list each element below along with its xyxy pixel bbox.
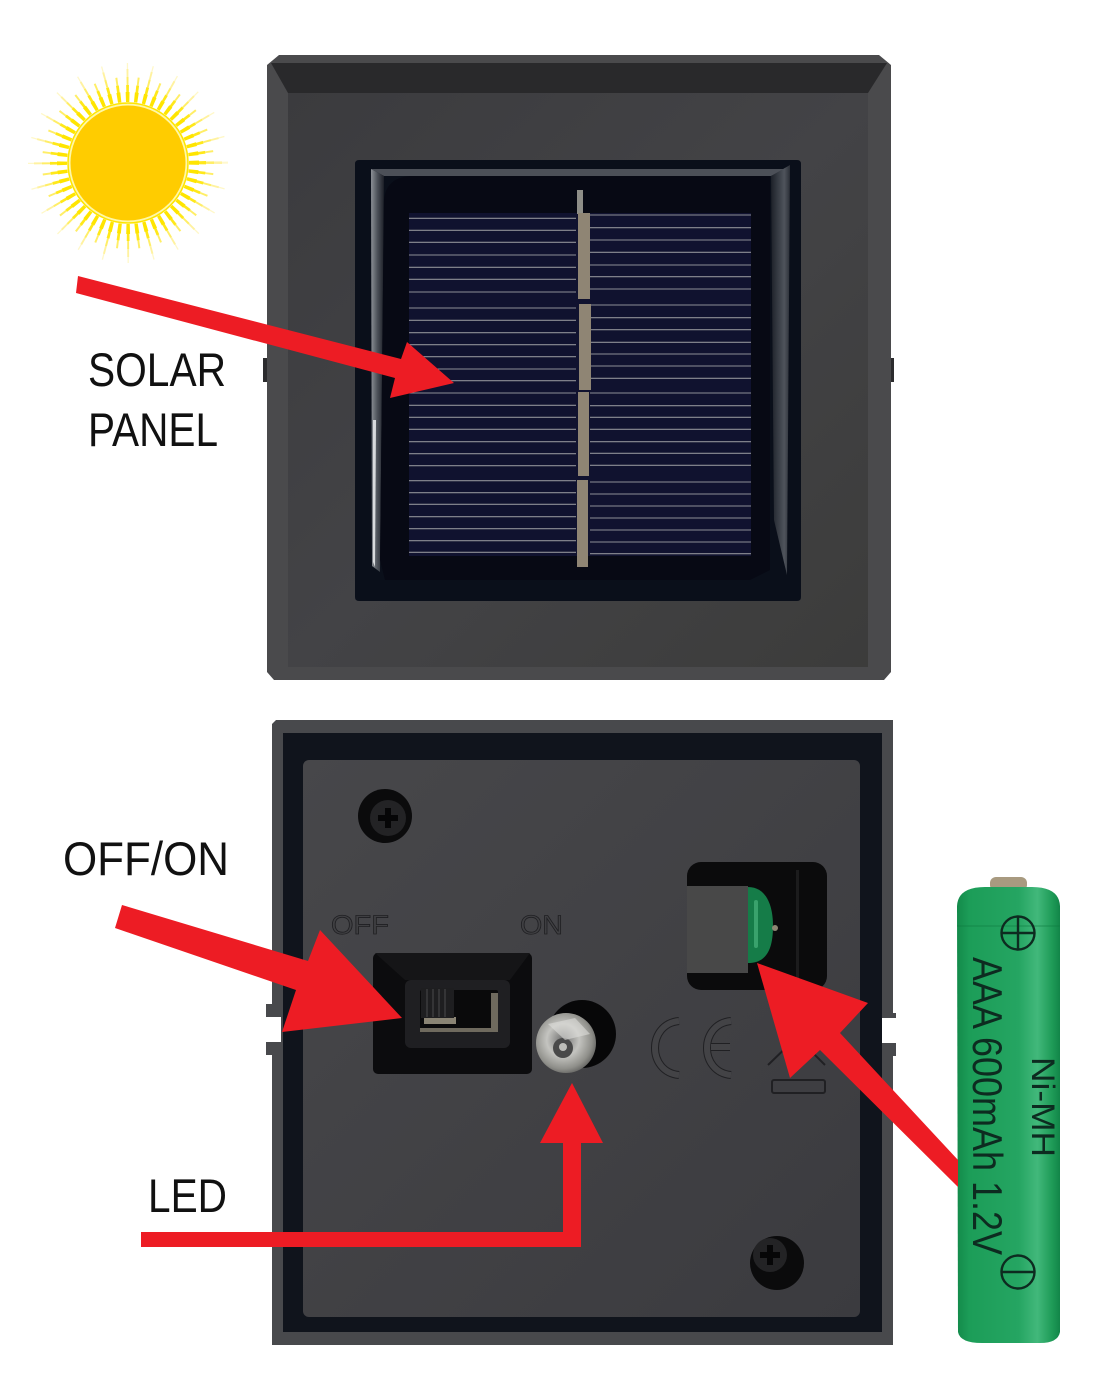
minus symbol <box>1002 1256 1034 1288</box>
arrow: to solar panel <box>76 276 454 398</box>
embossed OFF label: OFF <box>331 910 389 940</box>
solar cell grid lines <box>409 215 751 554</box>
eject symbol <box>768 1037 825 1093</box>
icon: bottom screw <box>750 1236 804 1290</box>
panel: device back side <box>266 720 896 1345</box>
battery label: chemistry: Ni-MH <box>1025 1057 1061 1157</box>
icon: top screw <box>358 789 412 843</box>
icon: sun <box>31 66 225 260</box>
solar cell surface <box>409 213 751 556</box>
arrow: to off/on switch <box>115 905 402 1032</box>
solar bus bars <box>577 190 591 567</box>
label: LED: LED <box>148 1169 227 1222</box>
panel glass gloss <box>371 165 790 575</box>
battery compartment <box>687 862 827 990</box>
slide switch <box>373 953 532 1074</box>
arrow: to LED <box>141 1083 603 1247</box>
label: solar panel <box>88 343 226 456</box>
label: solar panel: PANEL <box>88 403 218 456</box>
embossed ON label: ON <box>520 910 563 940</box>
battery <box>957 877 1061 1343</box>
battery label: capacity: AAA 600mAh 1.2V <box>964 957 1011 1255</box>
CE mark <box>655 1021 731 1075</box>
plus symbol <box>1002 916 1034 950</box>
label: off/on: OFF/ON <box>63 832 229 885</box>
LED <box>536 1000 616 1073</box>
back plate <box>303 760 860 1317</box>
label: solar panel: SOLAR <box>88 343 226 396</box>
panel: solar panel device, top side <box>263 55 894 680</box>
arrow: to battery compartment <box>757 963 958 1187</box>
